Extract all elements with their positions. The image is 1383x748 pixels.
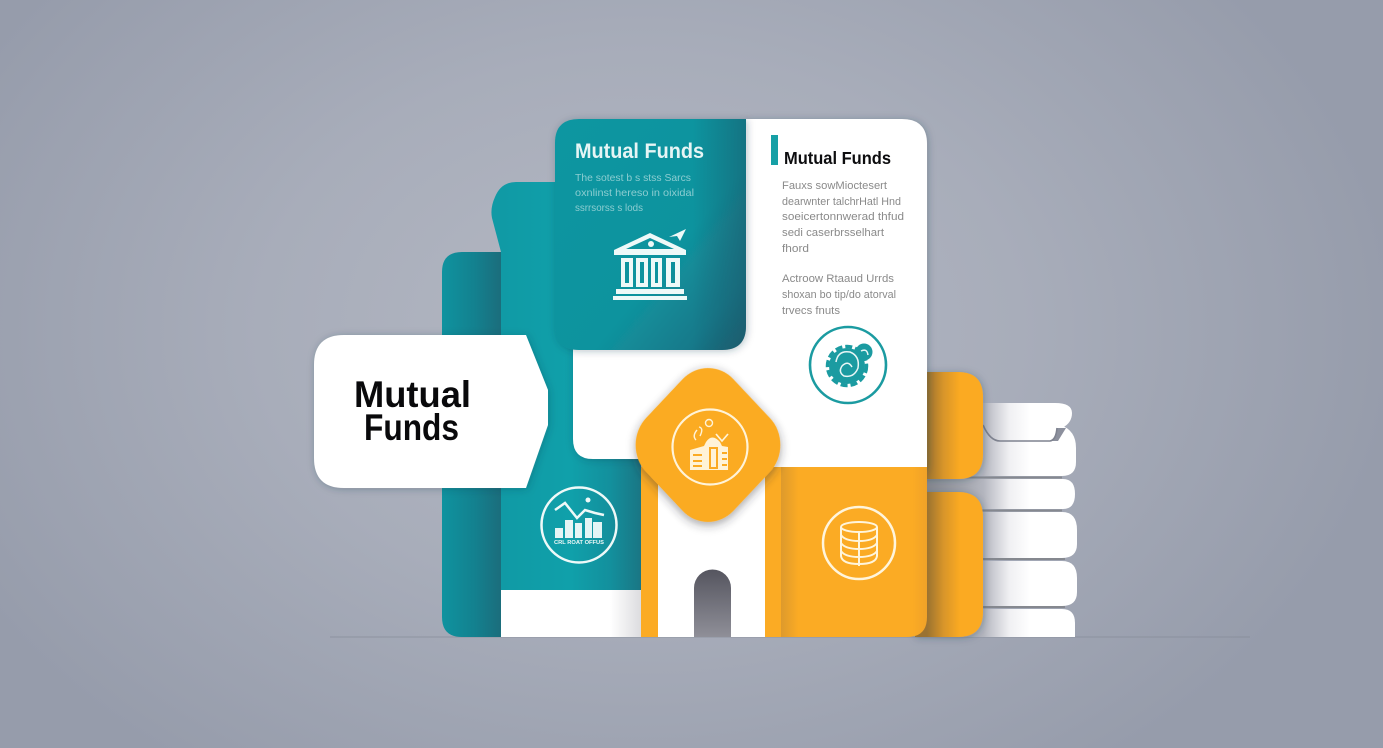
building column [641, 467, 781, 637]
label text: Funds [364, 407, 459, 448]
icon: coin stack [823, 507, 895, 579]
white card text lower: Actroow Rtaaud Urrds [782, 273, 895, 285]
mid teal column with tab [491, 182, 641, 590]
icon: bank with arrow [613, 229, 687, 300]
icon: chart in circle: CRL ROAT OFFUS [554, 540, 604, 546]
icon: chart in circle [542, 488, 616, 562]
icon: teal swirl circle [810, 327, 886, 403]
white card text upper: dearwnter talchrHatl Hnd [782, 196, 901, 208]
white card text lower [782, 273, 896, 317]
label text [354, 374, 471, 448]
white base under teal column [501, 590, 641, 637]
white card text upper [782, 180, 904, 255]
left label tag [314, 335, 548, 488]
teal card text: ssrrsorss s lods [575, 202, 643, 214]
teal card text [575, 172, 694, 214]
icon: house in circle [672, 410, 748, 484]
orange side tab lower [915, 492, 983, 637]
doorway arch [694, 570, 731, 637]
main white card [573, 119, 927, 470]
white card text upper: fhord [782, 243, 809, 255]
white card text lower: shoxan bo tip/do atorval [782, 289, 896, 301]
white card text upper: Fauxs sowMioctesert [782, 180, 887, 192]
orange side tab upper [915, 372, 983, 479]
white card heading [771, 135, 891, 168]
orange diamond badge [621, 352, 795, 538]
teal card text: oxnlinst hereso in oixidal [575, 187, 694, 199]
white card text upper: soeicertonnwerad thfud [782, 211, 904, 223]
rear teal column [442, 252, 501, 637]
label text: Mutual [354, 374, 471, 415]
white card heading: Mutual Funds [784, 148, 891, 168]
white card text upper: sedi caserbrsselhart [782, 227, 884, 239]
teal card text: The sotest b s stss Sarcs [575, 172, 691, 184]
white stacked sheets [927, 403, 1077, 637]
orange panel with coins icon [781, 467, 927, 637]
teal card [555, 119, 746, 350]
white card text lower: trvecs fnuts [782, 305, 841, 317]
teal card heading: Mutual Funds [575, 140, 704, 163]
